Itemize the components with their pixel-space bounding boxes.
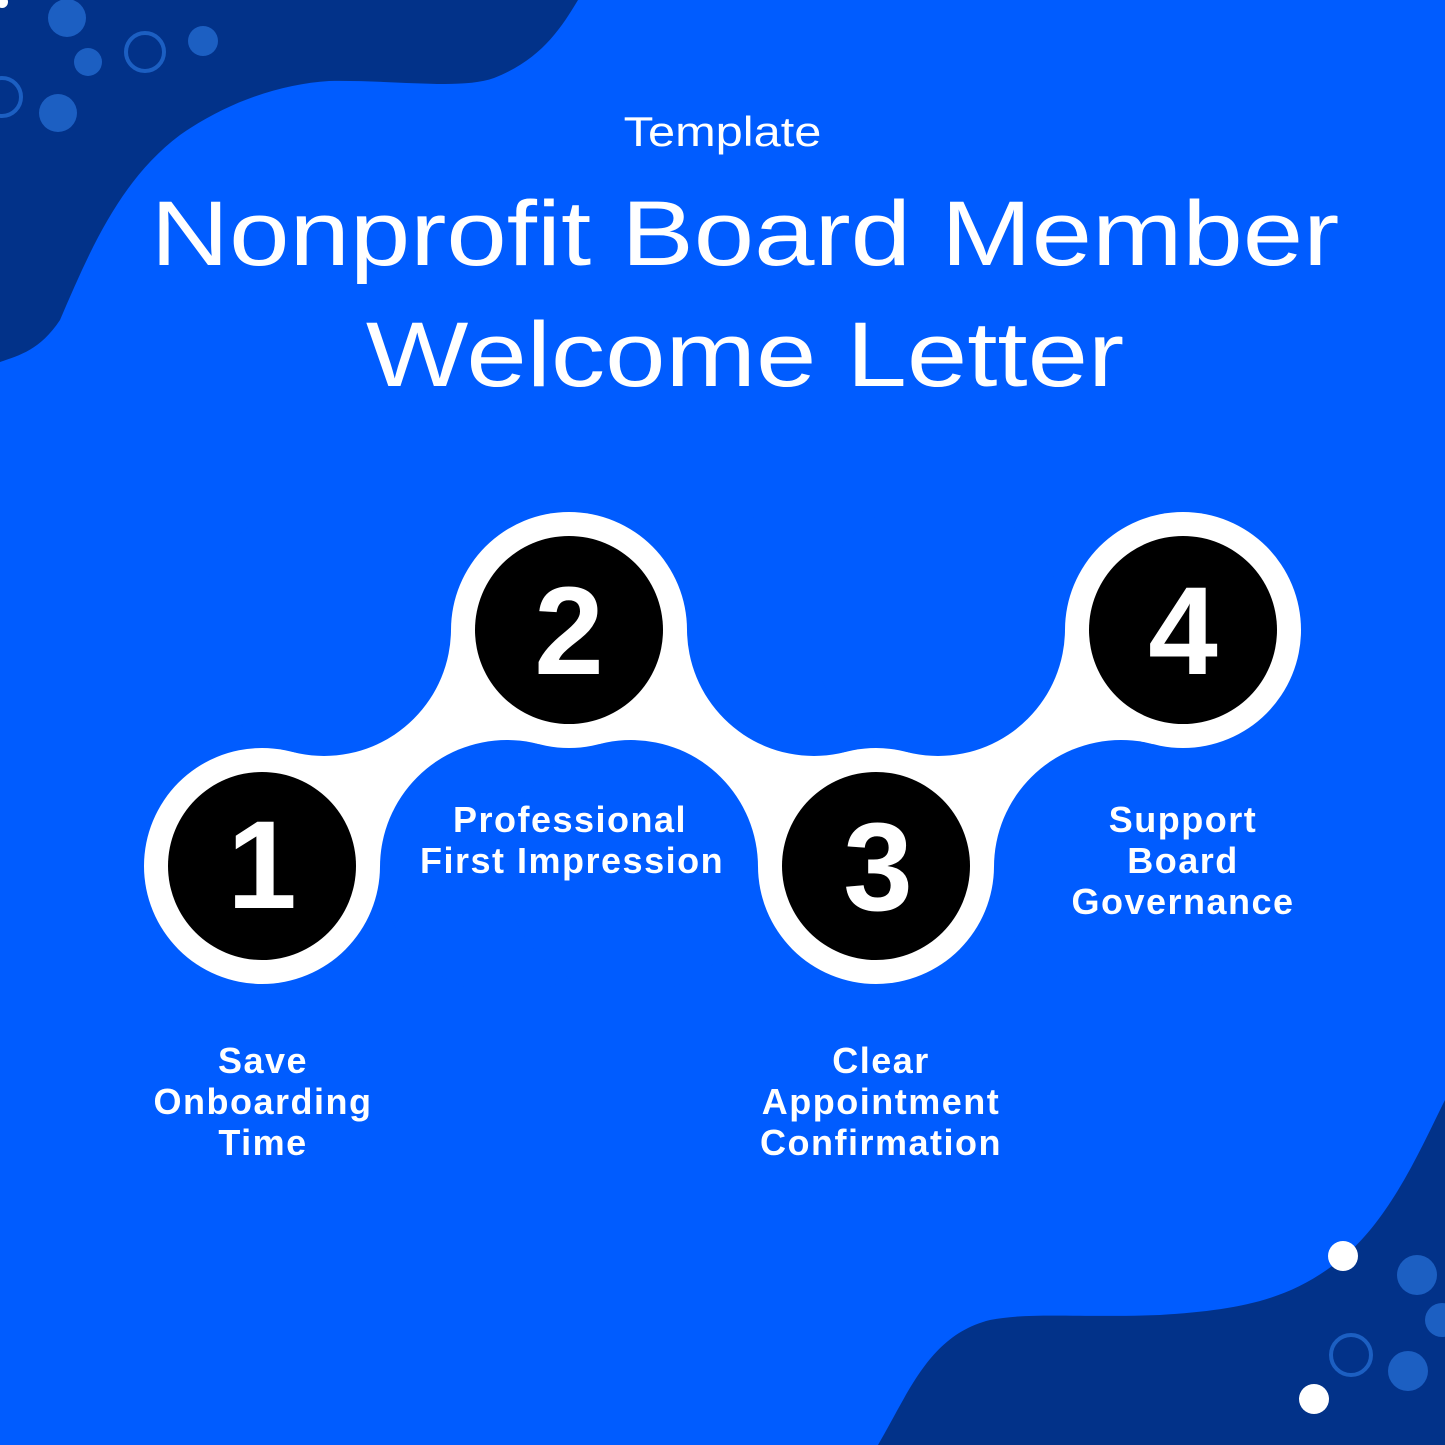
title: Nonprofit Board Member [151, 183, 1339, 285]
label 3: Confirmation [760, 1122, 1002, 1163]
step 1 [144, 748, 380, 984]
label 3 [760, 1040, 1002, 1163]
title [151, 183, 1339, 406]
subtitle: Template [624, 108, 821, 155]
label 3: Clear [832, 1040, 930, 1081]
step 1: 1 [227, 796, 297, 935]
step 3 [758, 748, 994, 984]
step 2 [451, 512, 687, 748]
label 2: Professional [453, 799, 687, 840]
blob: top-left [0, 0, 578, 362]
step 4 [1065, 512, 1301, 748]
label 1: Time [218, 1122, 308, 1163]
label 1: Onboarding [154, 1081, 372, 1122]
label 4: Governance [1071, 881, 1295, 922]
step 3: 3 [843, 798, 913, 937]
blob: bottom-right [878, 1100, 1445, 1445]
title: Welcome Letter [366, 304, 1124, 406]
label 4: Support [1109, 799, 1257, 840]
label 4: Board [1127, 840, 1239, 881]
label 1 [154, 1040, 372, 1163]
step 4: 4 [1148, 562, 1218, 701]
label 2 [420, 799, 724, 881]
label 4 [1071, 799, 1295, 922]
label 3: Appointment [762, 1081, 1000, 1122]
step 2: 2 [534, 562, 604, 701]
label 1: Save [218, 1040, 308, 1081]
label 2: First Impression [420, 840, 724, 881]
